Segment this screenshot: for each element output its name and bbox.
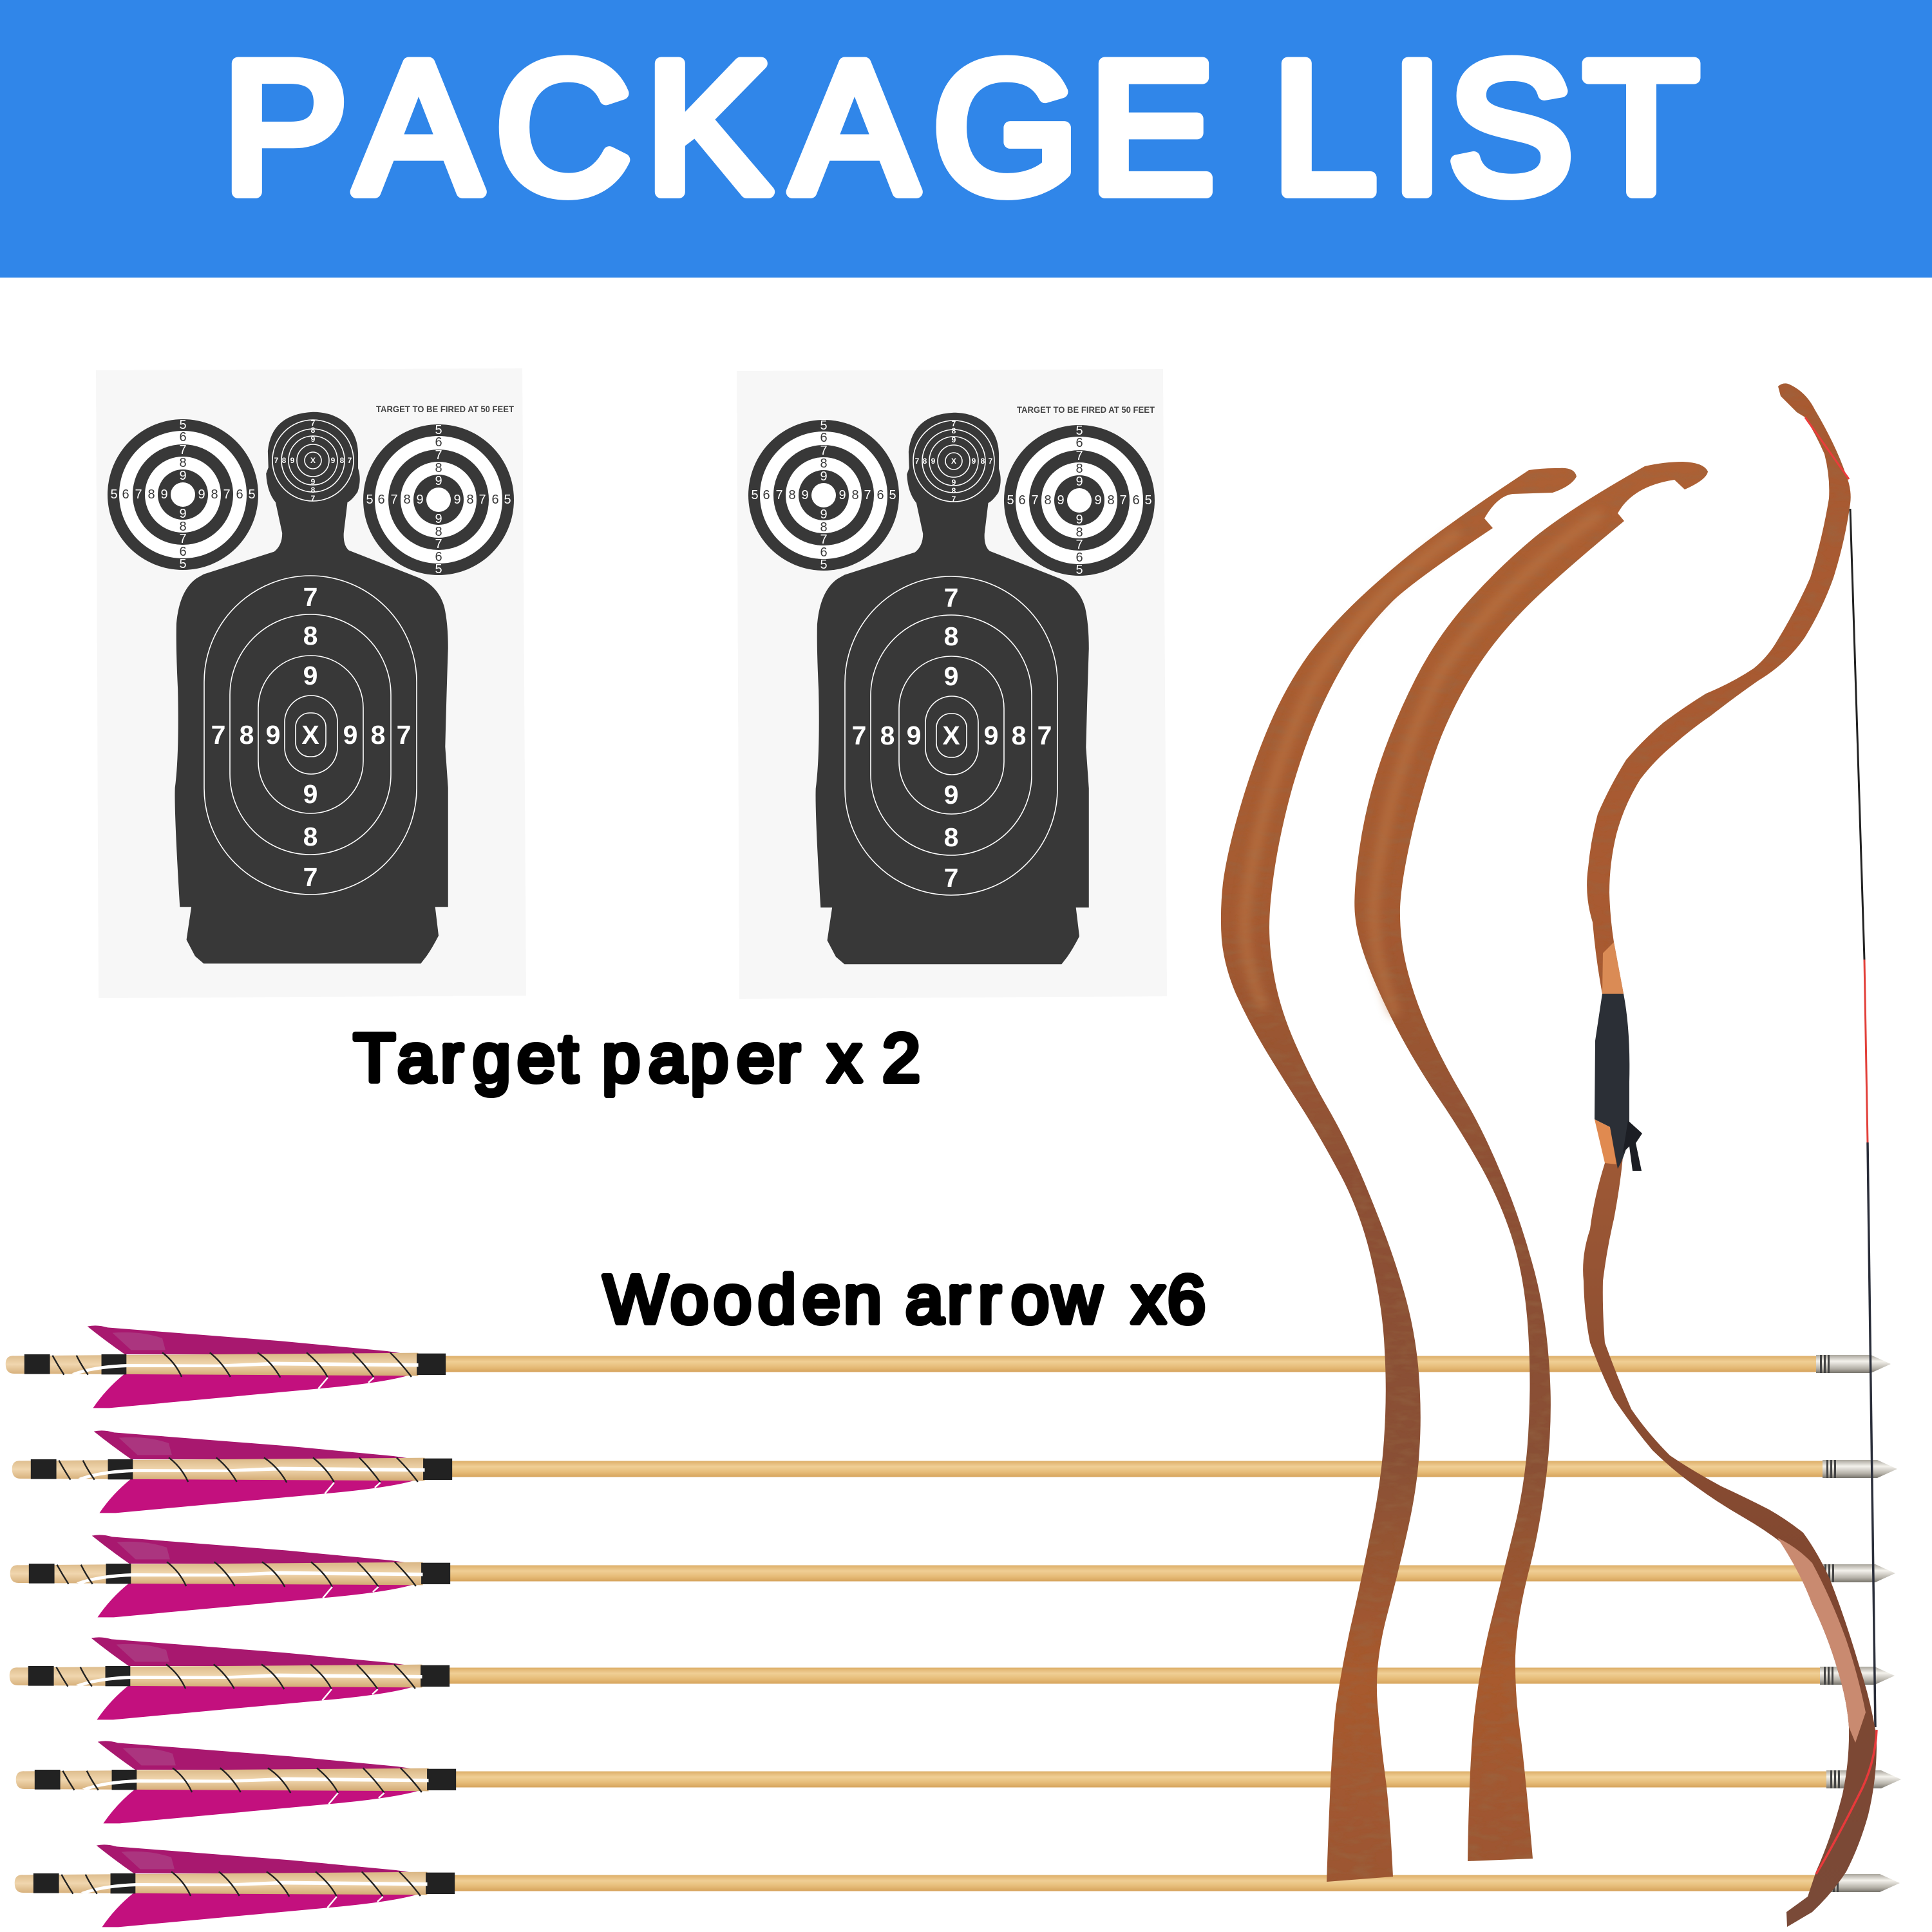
target note: TARGET TO BE FIRED AT 50 FEET [1017, 404, 1155, 415]
left ring target: 7 [135, 488, 142, 502]
head target: 8 [981, 457, 985, 466]
head target: 8 [311, 486, 316, 495]
right ring target: 5 [504, 493, 511, 507]
left ring target: 6 [236, 488, 243, 502]
left ring target [108, 418, 258, 571]
left ring target: 8 [788, 488, 796, 502]
left ring target: 7 [223, 488, 231, 502]
left ring target: 5 [751, 488, 759, 502]
left ring target: 7 [775, 488, 783, 502]
target paper 1 [96, 368, 526, 998]
strung bow [1583, 383, 1877, 1927]
left ring target: 9 [179, 507, 187, 521]
right ring target: 5 [1075, 424, 1083, 438]
left ring target: 9 [198, 488, 205, 502]
head target: 9 [952, 435, 956, 444]
left ring target: 6 [179, 430, 187, 444]
right ring target: 9 [1094, 493, 1102, 507]
left ring target [748, 419, 899, 572]
right ring target: 9 [416, 493, 424, 507]
right ring target: 8 [1075, 526, 1083, 540]
right ring target: 8 [435, 525, 442, 539]
target paper 2 [737, 369, 1167, 999]
left ring target: 9 [801, 488, 809, 502]
body target: 8 [944, 621, 958, 651]
title: PACKAGE LIST [223, 23, 1698, 232]
head target [913, 419, 994, 504]
head target: 7 [311, 494, 316, 503]
right ring target: 7 [435, 537, 442, 551]
body target: 8 [1012, 721, 1026, 750]
body target: 9 [343, 720, 357, 750]
leather strap [1623, 1121, 1642, 1171]
left ring target: 7 [864, 488, 871, 502]
right ring target: 7 [1119, 493, 1127, 507]
body target: 7 [303, 582, 317, 612]
bow limb 2 [1354, 462, 1708, 1861]
right ring target: 6 [435, 435, 442, 450]
right ring target: 5 [435, 562, 442, 576]
head target: 9 [311, 477, 316, 486]
head target: 7 [952, 419, 956, 428]
right ring target: 7 [1075, 449, 1083, 463]
left ring target: 9 [179, 469, 187, 483]
body target: 8 [240, 720, 254, 750]
body target: 8 [944, 822, 958, 852]
left ring target: 9 [838, 488, 846, 502]
arrow 5 [16, 1741, 1901, 1823]
right ring target [1004, 424, 1155, 577]
body target: 8 [303, 621, 317, 650]
right ring target: 5 [1144, 493, 1152, 507]
right ring target: 8 [403, 493, 411, 507]
left ring target: 6 [122, 488, 129, 502]
left ring target: 8 [820, 520, 828, 535]
body target: 9 [984, 721, 998, 750]
right ring target: 6 [1132, 493, 1140, 507]
head target: 7 [915, 457, 920, 466]
head target: 7 [274, 456, 279, 465]
right ring target: 9 [1075, 475, 1083, 489]
body target: 9 [944, 780, 958, 810]
lower limb [1583, 1127, 1877, 1927]
left ring target: 6 [820, 431, 828, 445]
body target: 7 [852, 721, 866, 750]
left ring target: 6 [762, 488, 770, 502]
right ring target: 6 [1075, 551, 1083, 565]
bow string [1850, 509, 1864, 960]
left ring target: 6 [179, 545, 187, 559]
head target: 8 [952, 426, 956, 435]
head target: X [310, 456, 316, 465]
head target: 7 [989, 457, 993, 466]
head target: X [951, 457, 956, 466]
left ring target: 5 [820, 558, 828, 572]
body target: 7 [211, 720, 225, 750]
left ring target: 8 [147, 488, 155, 502]
right ring target: 8 [1044, 493, 1052, 507]
arrow 2 [12, 1430, 1897, 1513]
right ring target: 9 [453, 493, 461, 507]
body target: 7 [1037, 721, 1052, 750]
right ring target: 9 [1075, 513, 1083, 527]
right ring target: 7 [390, 493, 398, 507]
arrow 6 [15, 1844, 1900, 1927]
right ring target: 5 [1075, 563, 1083, 577]
left ring target: 7 [820, 444, 828, 458]
left ring target: 6 [876, 488, 884, 502]
body target: 7 [944, 583, 958, 612]
head target: 7 [311, 419, 316, 428]
body target: 9 [303, 779, 317, 809]
left ring target: 5 [820, 419, 828, 433]
head target: 9 [972, 457, 976, 466]
left ring target: 9 [820, 507, 828, 522]
left ring target: 5 [110, 488, 118, 502]
right ring target: 7 [478, 493, 486, 507]
left ring target: 9 [160, 488, 168, 502]
right ring target: 9 [1057, 493, 1065, 507]
body target: X [942, 721, 960, 750]
orange grip base [1595, 1119, 1616, 1164]
header band [0, 0, 1932, 278]
body target: 7 [944, 863, 958, 893]
body target: 8 [371, 720, 385, 750]
body target: 7 [397, 720, 411, 750]
six wooden arrows [6, 1325, 1901, 1927]
right ring target: 8 [466, 493, 474, 507]
right ring target: 6 [491, 493, 499, 507]
left ring target: 9 [820, 469, 828, 484]
right ring target: 5 [435, 423, 442, 437]
arrow 3 [10, 1535, 1895, 1617]
right ring target: 7 [435, 448, 442, 462]
head target: 8 [952, 486, 956, 495]
left ring target: 7 [179, 532, 187, 546]
right ring target: 8 [435, 461, 442, 475]
body target: 8 [303, 822, 317, 851]
caption: target paper: Target paper x 2 [354, 1020, 920, 1096]
body target: 9 [907, 721, 921, 750]
head target: 9 [952, 478, 956, 487]
head target [272, 419, 354, 503]
red serving [1805, 417, 1849, 479]
left ring target: 7 [820, 533, 828, 547]
left ring target: 5 [248, 488, 256, 502]
right ring target: 8 [1107, 493, 1115, 507]
right ring target: 6 [1018, 493, 1026, 507]
right ring target: 6 [1075, 436, 1083, 450]
head target: 9 [290, 456, 295, 465]
left ring target: 7 [179, 443, 187, 457]
head target: 8 [282, 456, 287, 465]
body target [845, 576, 1057, 895]
upper limb [1587, 383, 1851, 994]
target note: TARGET TO BE FIRED AT 50 FEET [376, 404, 514, 414]
arrow 1 [6, 1325, 1891, 1408]
left ring target: 8 [820, 457, 828, 471]
body target: 8 [880, 721, 895, 750]
arrow 4 [10, 1637, 1895, 1719]
head target: 8 [923, 457, 927, 466]
body target: 7 [303, 862, 317, 892]
right ring target: 6 [435, 550, 442, 564]
head target: 9 [931, 457, 936, 466]
head target: 8 [340, 456, 345, 465]
left ring target: 8 [851, 488, 859, 502]
left ring target: 5 [889, 488, 896, 502]
right ring target: 7 [1031, 493, 1039, 507]
head target: 8 [311, 426, 316, 435]
head target: 9 [311, 435, 316, 444]
right ring target [363, 423, 514, 576]
head target: 7 [952, 495, 956, 504]
right ring target: 6 [377, 493, 385, 507]
left ring target: 6 [820, 545, 828, 560]
right ring target: 9 [435, 474, 442, 488]
head target: 7 [348, 456, 352, 465]
left ring target: 5 [179, 418, 187, 432]
body target [204, 576, 417, 895]
bow limb 1 [1221, 468, 1577, 1882]
head target: 9 [331, 456, 336, 465]
body target: 9 [266, 720, 280, 750]
left ring target: 8 [179, 520, 187, 534]
right ring target: 8 [1075, 462, 1083, 476]
body target: 9 [303, 661, 317, 690]
right ring target: 9 [435, 512, 442, 526]
grip wrap [1595, 994, 1629, 1169]
right ring target: 7 [1075, 538, 1083, 552]
left ring target: 5 [179, 557, 187, 571]
body target: 9 [944, 661, 958, 691]
body target: X [301, 720, 319, 750]
right ring target: 5 [366, 493, 374, 507]
left ring target: 8 [179, 456, 187, 470]
caption: wooden arrow: Wooden arrow x6 [603, 1262, 1206, 1338]
right ring target: 5 [1007, 493, 1014, 507]
left ring target: 8 [211, 488, 218, 502]
